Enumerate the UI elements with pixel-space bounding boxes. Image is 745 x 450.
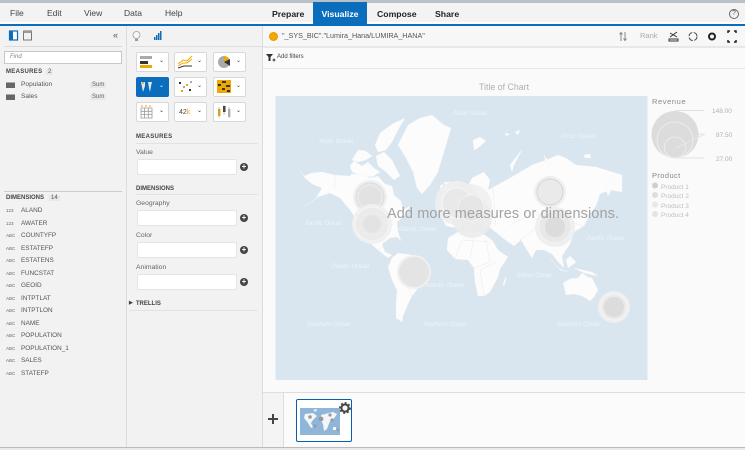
dimensions list: ABC	[6, 233, 15, 238]
ocean labels: Pacific Ocean	[332, 264, 370, 270]
ocean labels: Pacific Ocean	[305, 221, 343, 227]
ocean labels: Pacific Ocean	[587, 236, 625, 242]
divider above dimensions	[4, 191, 122, 192]
dimensions list: NAME	[21, 320, 39, 327]
ocean labels: Atlantic Ocean	[397, 227, 438, 233]
chart title: Title of Chart	[479, 82, 529, 92]
bottom edge	[0, 447, 745, 450]
dimensions list: ESTATENS	[21, 257, 54, 264]
feed box: geography	[137, 210, 237, 226]
panel: data sidebar	[0, 26, 127, 447]
add animation: +	[242, 277, 246, 286]
top window strip	[0, 0, 745, 3]
dimensions list: COUNTYFP	[21, 232, 56, 239]
heading: trellis	[129, 300, 258, 311]
feed box: animation	[137, 274, 237, 290]
feed box: value	[137, 159, 237, 175]
dimensions list: ABC	[6, 321, 15, 326]
tab: Share: Share	[435, 9, 459, 19]
toolbar icons	[619, 30, 737, 43]
measures count	[46, 69, 53, 75]
ocean labels: Atlantic Ocean	[424, 283, 465, 289]
panel: main canvas	[263, 26, 745, 392]
icon: thumbnail settings	[339, 402, 351, 414]
dimensions list: POPULATION_1	[21, 345, 69, 352]
menu: Data: Data	[124, 8, 142, 18]
divider under tabs	[130, 46, 262, 47]
ocean labels: Southern Ocean	[307, 322, 351, 328]
chart type buttons: ⌄	[197, 83, 202, 89]
label: geography: Geography	[136, 200, 170, 207]
divider under toggles	[4, 46, 122, 47]
icon: help: ?	[732, 10, 736, 17]
add page column	[263, 393, 284, 447]
menu bar lower band	[0, 22, 745, 24]
tab: Visualize active: Visualize	[321, 9, 359, 19]
dataset name: "_SYS_BIC"."Lumira_Hana/LUMIRA_HANA"	[282, 31, 425, 40]
rank label: Rank	[640, 31, 658, 40]
tab: Visualize active	[313, 2, 367, 25]
thumbnail	[296, 399, 352, 442]
heading: dimensions feed: DIMENSIONS	[136, 186, 174, 192]
ocean labels: Southern Ocean	[423, 322, 467, 328]
measure row: Population: Sum	[92, 82, 104, 88]
add geography	[240, 214, 248, 222]
chart type buttons: ⌄	[236, 83, 241, 89]
add filters label: Add filters	[277, 54, 304, 60]
dimensions list: AWATER	[21, 220, 47, 227]
search box: Find	[10, 54, 22, 60]
chart type buttons: ⌄	[159, 108, 164, 114]
feed box: color	[137, 242, 237, 258]
product legend: Product 4	[661, 212, 689, 219]
ocean labels: Indian Ocean	[517, 273, 553, 279]
icon: collapse panel: «	[113, 30, 118, 40]
icon: help	[729, 9, 739, 19]
icon: bulb and bars tabs	[132, 31, 162, 41]
country borders	[335, 175, 584, 296]
heading: measures feed: MEASURES	[136, 134, 172, 140]
chart type buttons: ⌄	[197, 108, 202, 114]
dimensions list: ABC	[6, 271, 15, 276]
icon: add page	[268, 414, 278, 424]
ocean labels: Arctic Ocean	[318, 139, 354, 145]
add value	[240, 163, 248, 171]
dimensions list: ALAND	[21, 207, 42, 214]
dimensions list: ABC	[6, 283, 15, 288]
dimensions list	[6, 207, 69, 377]
measure row: Sales	[6, 93, 106, 100]
dimensions list: 123	[6, 208, 14, 213]
dimensions list: ABC	[6, 346, 15, 351]
revenue size legend: 87.50	[716, 132, 733, 139]
chart type buttons: 42k	[179, 109, 190, 116]
chart type buttons: ⌄	[236, 58, 241, 64]
tab: Prepare: Prepare	[272, 9, 304, 19]
dimensions list: STATEFP	[21, 370, 49, 377]
dimensions list: ESTATEFP	[21, 245, 53, 252]
menu: Edit: Edit	[47, 8, 62, 18]
menu bar	[0, 3, 745, 22]
icon: dataset	[269, 32, 278, 41]
icon: add filters	[266, 54, 276, 62]
label: color: Color	[136, 232, 152, 239]
dimensions list: ABC	[6, 258, 15, 263]
dimensions list: INTPTLON	[21, 307, 53, 314]
dimensions list: ABC	[6, 371, 15, 376]
icon: sidebar view toggles	[8, 30, 32, 41]
menu: View: View	[84, 8, 102, 18]
product legend: Product	[652, 171, 681, 180]
heading: measures: MEASURES	[6, 69, 42, 75]
revenue size legend: 27.00	[716, 156, 733, 163]
menu: Help: Help	[165, 8, 182, 18]
product legend: Product 1	[661, 184, 689, 191]
ocean labels: Arctic Ocean	[560, 134, 596, 140]
bubbles	[352, 176, 630, 323]
menu: File: File	[10, 8, 24, 18]
add animation	[240, 278, 248, 286]
dimensions count	[49, 195, 60, 201]
dimensions list: FUNCSTAT	[21, 270, 54, 277]
panel: storyboard strip	[263, 392, 745, 447]
measures count: 2	[48, 69, 51, 75]
add color	[240, 246, 248, 254]
dimensions list: ABC	[6, 333, 15, 338]
dimensions list: 123	[6, 221, 14, 226]
revenue size legend	[652, 97, 733, 163]
chart type buttons: ⌄	[159, 58, 164, 64]
dimensions count: 14	[51, 195, 58, 201]
label: animation: Animation	[136, 264, 166, 271]
chart type buttons: ⌄	[159, 83, 164, 89]
ocean labels: Arctic Ocean	[452, 111, 488, 117]
tab: Compose: Compose	[377, 9, 417, 19]
dimensions list: SALES	[21, 357, 42, 364]
product legend	[652, 171, 689, 219]
measure row: Population: Population	[21, 81, 52, 88]
revenue size legend: Revenue	[652, 97, 686, 106]
ocean labels: Southern Ocean	[557, 322, 601, 328]
add value: +	[242, 162, 246, 171]
revenue size legend: 148.00	[712, 108, 732, 115]
map ocean	[276, 96, 648, 380]
add color: +	[242, 245, 246, 254]
product legend: Product 3	[661, 203, 689, 210]
overlay message: Add more measures or dimensions.	[387, 206, 619, 222]
measure row: Sales: Sum	[92, 94, 104, 100]
dimensions list: ABC	[6, 296, 15, 301]
dimensions list: GEOID	[21, 282, 42, 289]
blue rule	[0, 24, 745, 26]
divider under filters	[263, 68, 745, 69]
dimensions list: ABC	[6, 358, 15, 363]
ocean labels	[305, 111, 625, 328]
search box	[4, 51, 122, 64]
add geography: +	[242, 213, 246, 222]
toolbar strip	[263, 26, 745, 48]
chart type buttons: ⌄	[197, 58, 202, 64]
label: value: Value	[136, 149, 153, 156]
dimensions list: POPULATION	[21, 332, 62, 339]
product legend: Product 2	[661, 193, 689, 200]
measure row: Sales: Sales	[21, 93, 38, 100]
heading: measures feed	[136, 134, 258, 144]
dimensions list: ABC	[6, 308, 15, 313]
heading: dimensions: DIMENSIONS	[6, 195, 44, 201]
chart type buttons	[136, 52, 246, 122]
heading: trellis: ▶ TRELLIS	[129, 300, 161, 307]
land masses	[300, 115, 622, 322]
measure row: Population	[6, 81, 106, 88]
dimensions list: INTPTLAT	[21, 295, 51, 302]
heading: dimensions feed	[136, 186, 258, 195]
chart type buttons: ⌄	[236, 108, 241, 114]
panel: chart builder	[127, 26, 263, 447]
dimensions list: ABC	[6, 246, 15, 251]
